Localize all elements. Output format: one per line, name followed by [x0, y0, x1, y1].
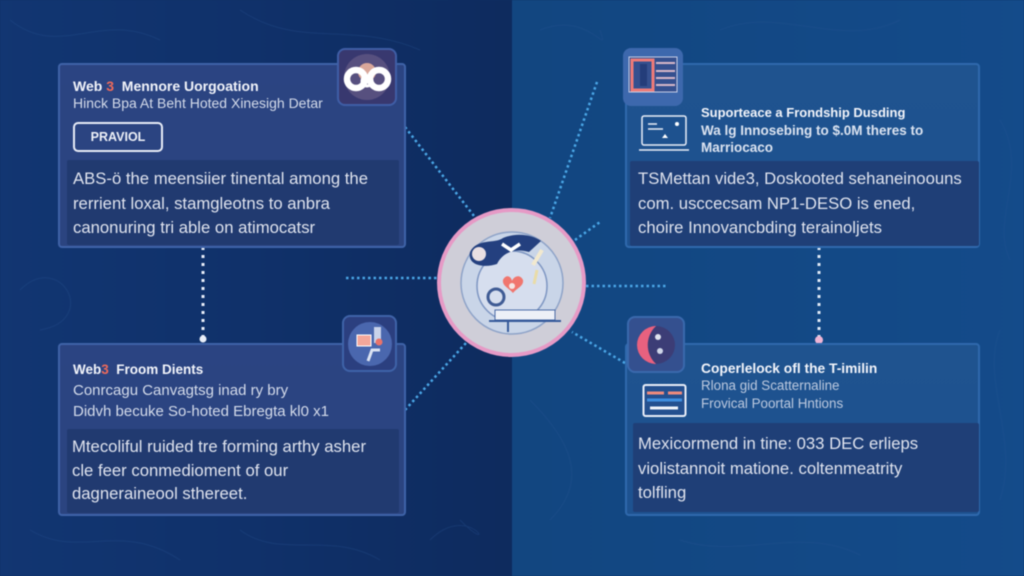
badge: PRAVIOL: [91, 130, 145, 144]
body text: [72, 169, 368, 238]
subheading: [73, 382, 329, 420]
body text: ABS-ö the meensiier tinental among the: [73, 169, 368, 188]
body band: [67, 429, 399, 513]
heading: Coperlelock ofl the T-imilin: [701, 361, 877, 376]
subheading: Conrcagu Canvagtsg inad ry bry: [73, 382, 288, 399]
body text: dagneraineool sthereet.: [72, 484, 247, 503]
body text: choire Innovancbding terainoljets: [638, 218, 882, 237]
body text: Mtecoliful ruided tre forming arthy asher: [72, 437, 366, 456]
connector: top-left to hub: [405, 127, 474, 216]
icon: planet: [627, 316, 685, 373]
panel: top right: [625, 63, 980, 248]
panel: top left: [58, 63, 406, 248]
subheading: [701, 378, 844, 410]
body band: [633, 423, 979, 512]
body band: [630, 161, 979, 246]
connector: bottom-right to hub: [572, 332, 625, 363]
icon: document: [623, 48, 683, 106]
central hub: [436, 207, 587, 358]
subheading: Frovical Poortal Hntions: [701, 396, 843, 410]
body text: rerrient loxal, stamgleotns to anbra: [73, 194, 330, 212]
icon: laptop: [638, 114, 690, 152]
heading: Web3 Froom Dients: [73, 362, 203, 377]
body text: tolfling: [638, 483, 686, 502]
body text: Mexicormend in tine: 033 DEC erlieps: [638, 434, 918, 453]
subheading: Wa lg Innosebing to $.0M theres to: [701, 123, 923, 138]
connector: left stub to hub: [346, 277, 437, 279]
connector: top-right to hub: [550, 82, 597, 218]
body text: [72, 437, 366, 504]
subheading: Didvh becuke So-hoted Ebregta kl0 x1: [73, 403, 329, 420]
body text: com. usccecsam NP1-DESO is ened,: [638, 194, 915, 212]
subheading: Rlona gid Scatternaline: [701, 378, 839, 393]
connector: right branch to hub: [575, 222, 600, 240]
connector: left vertical dotted: [200, 247, 206, 342]
icon: devices: [342, 315, 397, 372]
body text: [638, 169, 962, 238]
heading: Suporteace a Frondship Dusding: [701, 105, 905, 120]
connector: right stub to hub: [586, 285, 668, 287]
badge: [73, 122, 163, 152]
icon: rings: [337, 48, 397, 106]
connector: right vertical dotted: [815, 247, 823, 344]
body text: cle feer conmedioment of our: [72, 460, 288, 480]
subheading: Hinck Bpa At Beht Hoted Xinesigh Detar: [73, 95, 323, 111]
icon: map card: [642, 383, 688, 418]
body text: canonuring tri able on atimocatsr: [73, 218, 315, 237]
connector: bottom-left to hub: [405, 343, 466, 410]
body text: [638, 434, 918, 502]
subheading: [700, 123, 924, 155]
panel: bottom right: [625, 343, 980, 516]
panel: bottom left: [58, 343, 406, 516]
body text: TSMettan vide3, Doskooted sehaneinoouns: [638, 169, 962, 188]
body band: [67, 160, 399, 245]
subheading: Marriocaco: [701, 140, 773, 155]
body text: violistannoit matione. coltenmeatrity: [638, 458, 902, 478]
heading: Web 3 Mennore Uorgoation: [73, 78, 259, 94]
